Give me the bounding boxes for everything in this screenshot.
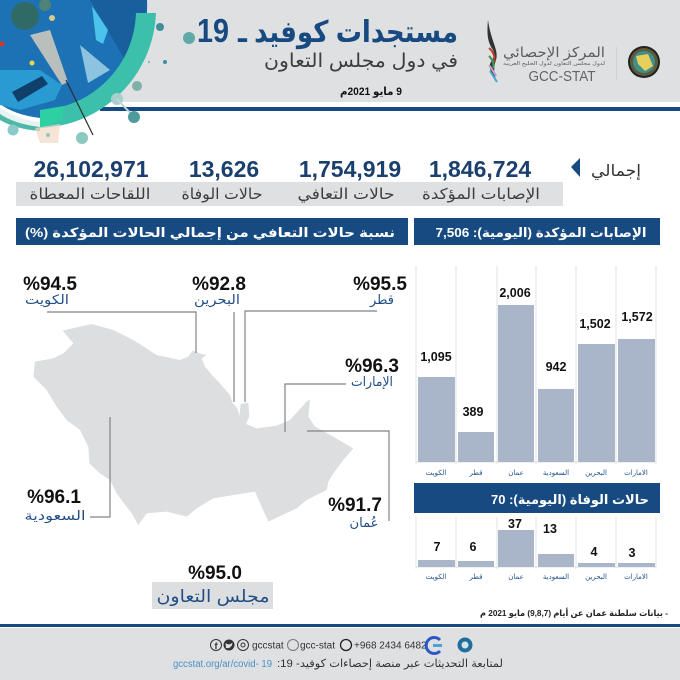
bar: Oman: 2,006 [499, 286, 531, 300]
bar: UAE: الامارات [624, 470, 648, 477]
panel heading: recovery rate [16, 218, 408, 245]
callout: Kuwait: الكويت [25, 292, 69, 308]
bar: Oman: عمان [508, 470, 524, 477]
callout: Bahrain [192, 274, 246, 402]
bar: Bahrain: 1,502 [579, 317, 611, 331]
bar: Kuwait [418, 350, 455, 477]
callout: Oman [307, 431, 389, 530]
bar: Kuwait [418, 540, 455, 581]
icon: partner logo [426, 637, 442, 654]
callout: Qatar: %95.5 [353, 274, 407, 295]
stat: recovered [298, 156, 401, 204]
bar: UAE: 3 [629, 546, 636, 560]
callout: Saudi Arabia [24, 417, 110, 524]
callout: Saudi Arabia: %96.1 [27, 487, 81, 508]
stat: vaccines [30, 156, 150, 203]
stat: recovered: 1,754,919 [299, 156, 401, 182]
bar: Saudi: 13 [543, 522, 557, 536]
stat: confirmed: 1,846,724 [429, 156, 531, 182]
icon: linkedin-style [288, 640, 298, 650]
social contacts row [210, 637, 472, 654]
bar: Saudi: السعودية [543, 574, 569, 581]
callout: Saudi Arabia: السعودية [24, 508, 86, 524]
panel heading: daily confirmed: الإصابات المؤكدة (اليومية): 7,506 [436, 225, 646, 240]
bar: Bahrain: البحرين [585, 470, 607, 477]
callout: Bahrain: البحرين [194, 292, 240, 308]
logo: GCC-STAT: المركز الإحصائي [503, 44, 605, 61]
bar: Qatar: 389 [463, 405, 483, 419]
title: 19 [197, 12, 229, 49]
footer link line: gccstat.org/ar/covid- 19 [173, 659, 272, 670]
callout: GCC overall: %95.0 [188, 563, 242, 584]
bar: Oman: عمان [508, 574, 524, 581]
callout: UAE [285, 356, 399, 432]
bar chart: daily deaths [416, 517, 656, 581]
panel heading: daily deaths [414, 483, 660, 513]
header band [0, 0, 680, 111]
totals label with arrow: إجمالي [591, 163, 641, 181]
bar: Bahrain [578, 545, 615, 581]
icon: whatsapp [340, 640, 352, 650]
bar chart: daily confirmed [416, 266, 656, 477]
header illustration: circular tech image with teal ring [0, 0, 195, 144]
stat: deaths [182, 156, 262, 203]
bar: Bahrain: البحرين [585, 574, 607, 581]
bar: UAE: الامارات [624, 574, 648, 581]
bar: UAE [618, 546, 655, 581]
callout: GCC overall [152, 563, 273, 609]
logo: GCC-STAT [487, 20, 617, 85]
bar: UAE [618, 310, 655, 477]
footer band [0, 624, 680, 680]
callout: GCC overall: مجلس التعاون [156, 587, 270, 606]
date: 9 مايو 2021م [340, 86, 402, 98]
panel heading: daily deaths: حالات الوفاة (اليومية): 70 [491, 492, 649, 507]
logo: GCC-STAT: GCC-STAT [528, 68, 596, 85]
callout: Bahrain: %92.8 [192, 274, 246, 295]
bar: Kuwait: الكويت [426, 573, 446, 581]
panel heading: daily confirmed [414, 218, 660, 245]
social contacts row: +968 2434 6482 [354, 640, 427, 652]
bar: UAE: 1,572 [621, 310, 653, 324]
footer link line: لمتابعة التحديثات عبر منصة إحصاءات كوفيد- 19: [277, 658, 503, 670]
icons: facebook, twitter, instagram: f [214, 641, 218, 651]
stat: deaths: 13,626 [189, 156, 259, 182]
map of GCC [33, 324, 353, 525]
callout: Oman: عُمان [350, 515, 378, 530]
callout: Oman: %91.7 [328, 495, 382, 516]
stat: vaccines: 26,102,971 [33, 156, 149, 182]
footer link line [173, 658, 503, 670]
totals label with arrow [571, 158, 641, 181]
callout: Qatar [245, 274, 407, 402]
social contacts row: gccstat [252, 640, 284, 652]
stat: confirmed: الإصابات المؤكدة [422, 186, 540, 203]
bar: Saudi [538, 522, 574, 581]
callout: Kuwait [23, 274, 196, 353]
bar: Qatar: قطر [469, 470, 482, 477]
title [197, 12, 458, 49]
bar: Qatar [458, 405, 494, 477]
stat: recovered: حالات التعافي [298, 186, 394, 204]
callout: Kuwait: %94.5 [23, 274, 77, 295]
stat: vaccines: اللقاحات المعطاة [30, 186, 150, 203]
subtitle: في دول مجلس التعاون [264, 51, 458, 72]
bar: Bahrain: 4 [591, 545, 598, 559]
social contacts row: gcc-stat [300, 640, 335, 652]
bar: Saudi [538, 360, 574, 477]
callout: Qatar: قطر [369, 292, 394, 308]
logo: GCC-STAT: لدول مجلس التعاون لدول الخليج العربية [503, 61, 606, 67]
icon: GCC emblem [628, 46, 660, 78]
bar: Kuwait: 1,095 [420, 350, 452, 364]
panel heading: recovery rate: نسبة حالات التعافي من إجمالي الحالات المؤكدة (%) [25, 225, 395, 240]
bar: Kuwait: 7 [434, 540, 441, 554]
bar: Oman: 37 [508, 517, 522, 531]
band behind labels [16, 182, 563, 206]
icons: facebook, twitter, instagram [210, 640, 248, 651]
bar: Qatar: قطر [469, 574, 482, 581]
stat: confirmed [422, 156, 540, 203]
stat: deaths: حالات الوفاة [182, 186, 262, 203]
icon: round seal [458, 638, 472, 652]
bar: Kuwait: الكويت [426, 469, 446, 477]
footnote: - بيانات سلطنة عمان عن أيام (9,8,7) مايو 2021 م [480, 607, 668, 619]
bar: Qatar: 6 [470, 540, 477, 554]
bar: Bahrain [578, 317, 615, 477]
callout: UAE: %96.3 [345, 356, 399, 377]
callout: UAE: الإمارات [351, 374, 393, 390]
title: مستجدات كوفيد ـ [237, 16, 458, 49]
bar: Qatar [458, 540, 494, 581]
bar: Saudi: السعودية [543, 470, 569, 477]
totals row [16, 156, 641, 206]
bar: Oman [498, 517, 534, 581]
bar: Oman [498, 286, 534, 477]
bar: Saudi: 942 [546, 360, 566, 374]
